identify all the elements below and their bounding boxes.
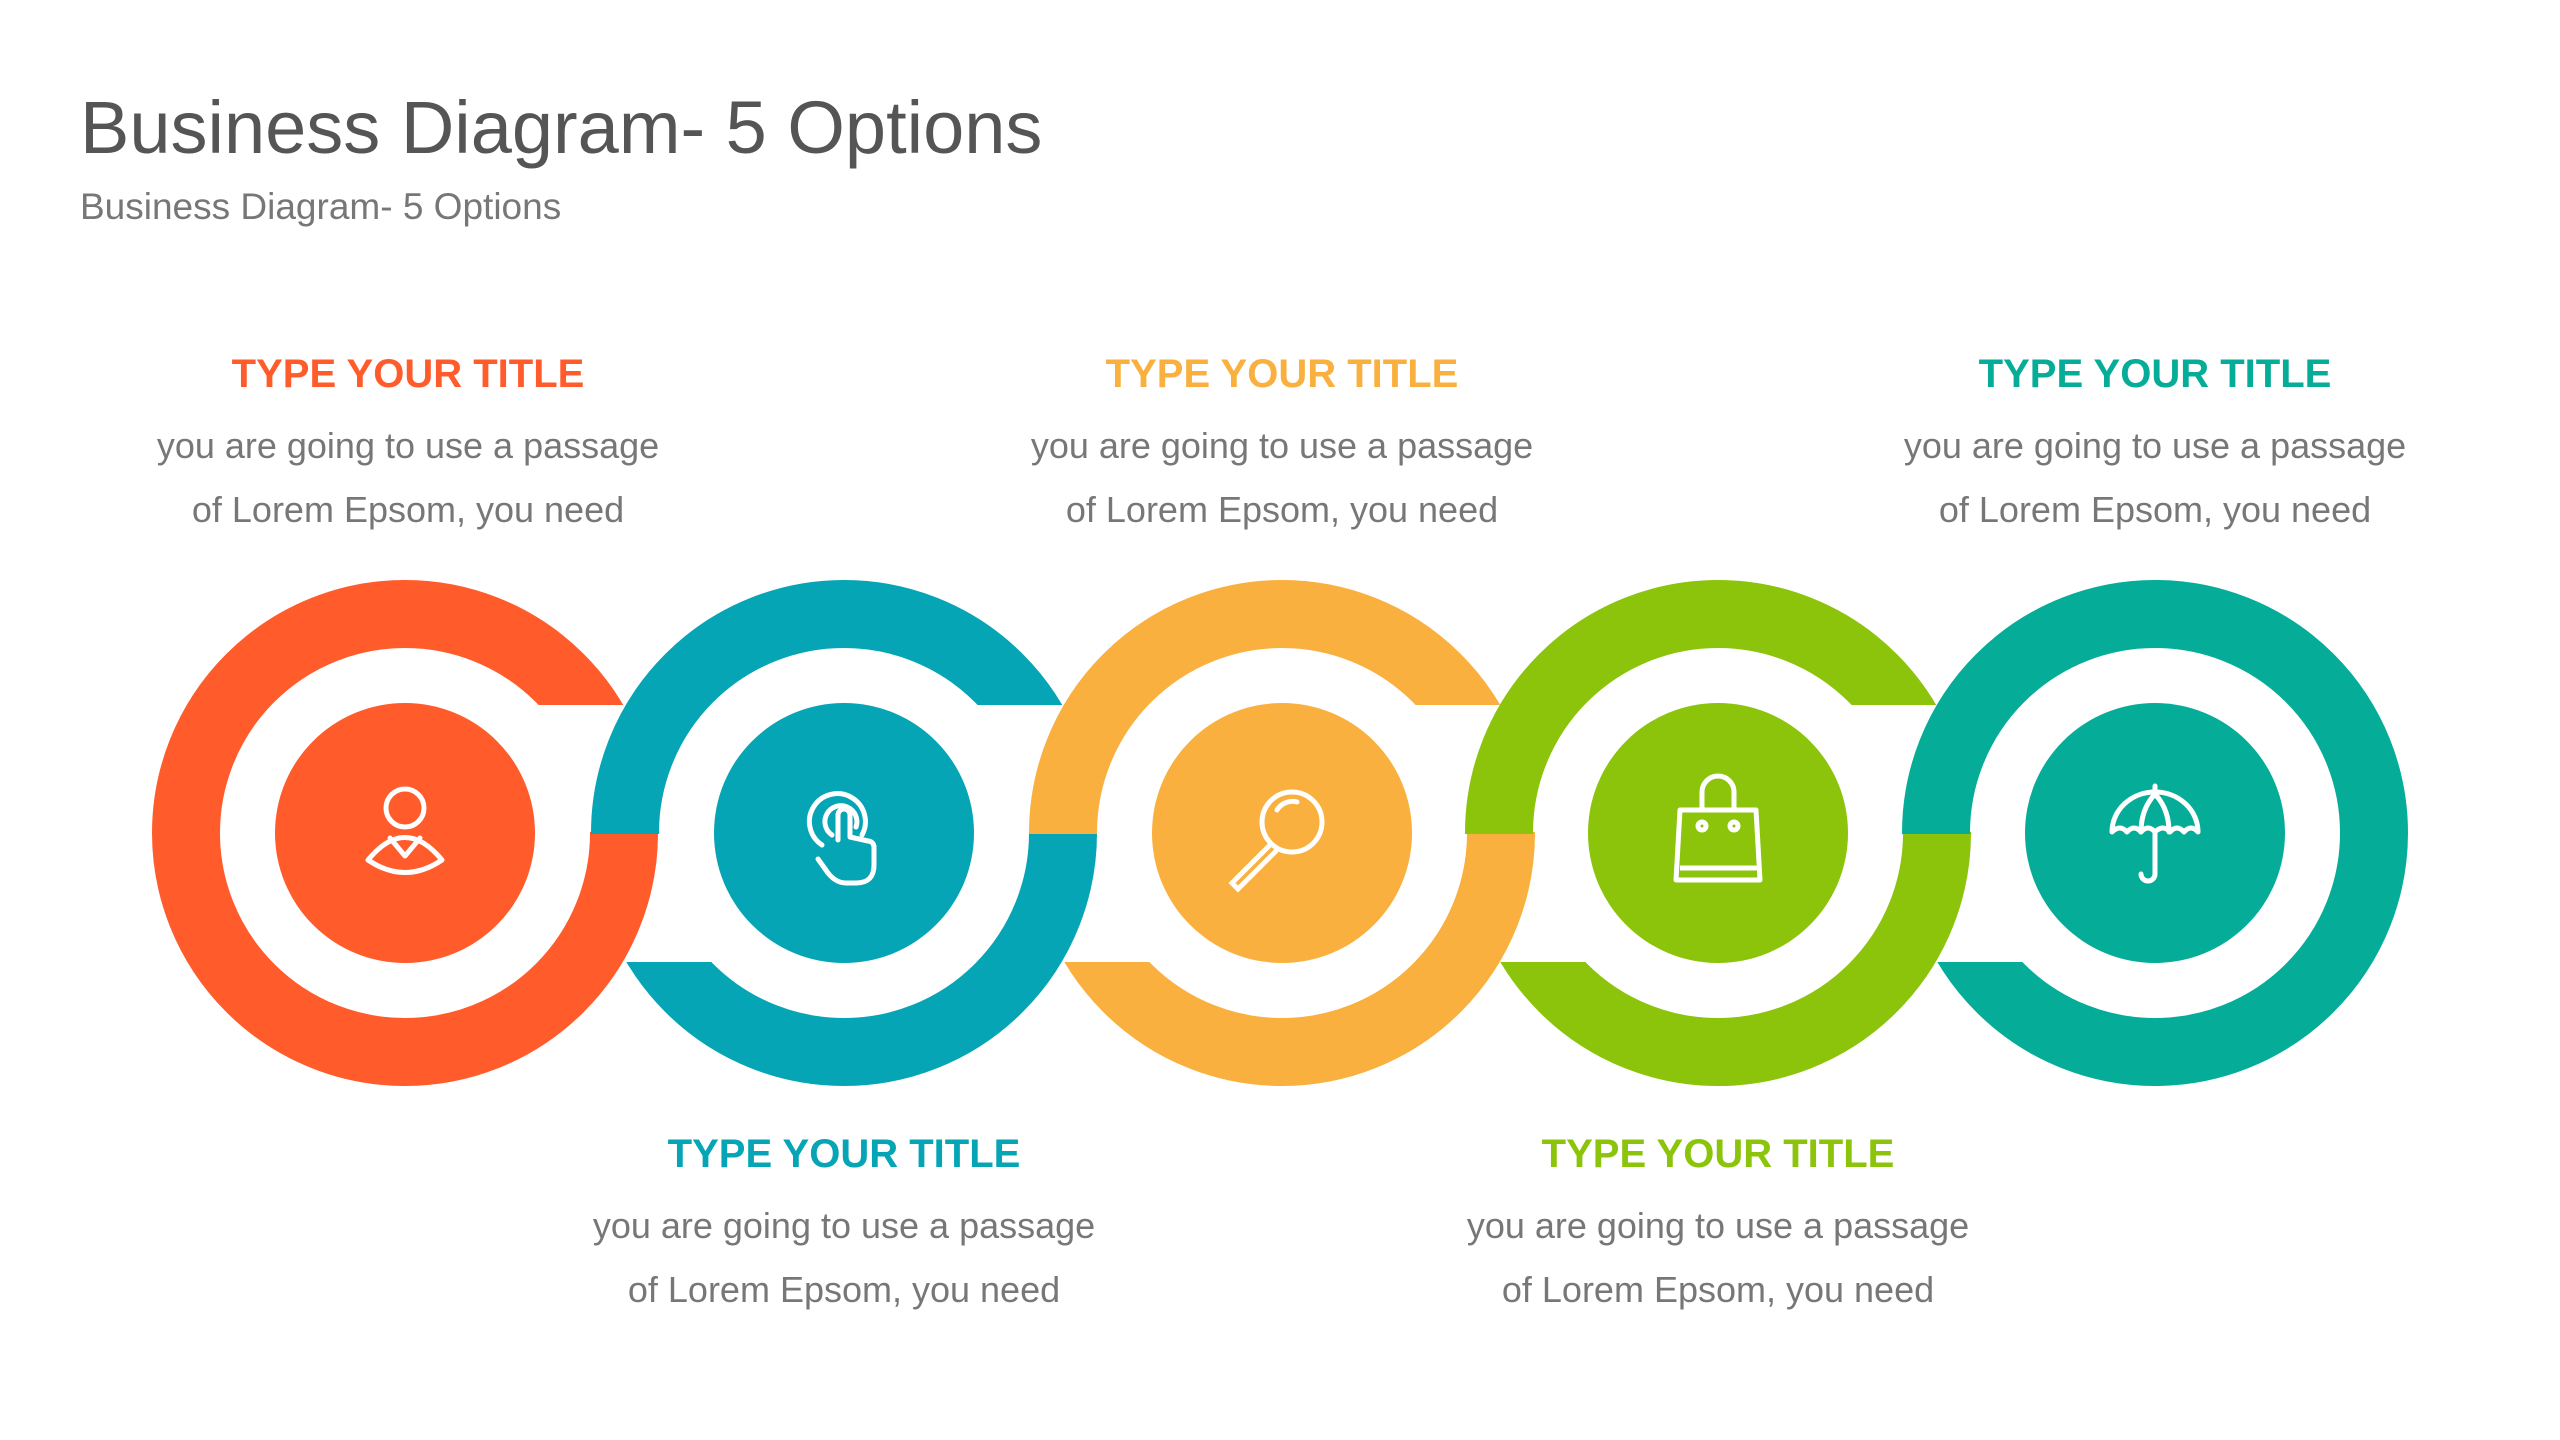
text block 3: TYPE YOUR TITLE [1106, 352, 1458, 396]
text block 5: TYPE YOUR TITLE [1979, 352, 2331, 396]
text block 3: of Lorem Epsom, you need [1066, 489, 1498, 530]
text block 1: you are going to use a passage [157, 425, 659, 466]
icon: person [368, 789, 442, 872]
subtitle: Business Diagram- 5 Options [80, 186, 561, 227]
title: Business Diagram- 5 Options [80, 86, 1042, 169]
text block 1: of Lorem Epsom, you need [192, 489, 624, 530]
ring diagram [152, 580, 2408, 1086]
icon: touch hand [809, 794, 874, 883]
text block 5: you are going to use a passage [1904, 425, 2406, 466]
text block 1 [157, 352, 659, 530]
text block 4 [1467, 1132, 1969, 1310]
text block 3: you are going to use a passage [1031, 425, 1533, 466]
text block 2 [593, 1132, 1095, 1310]
text block 5: of Lorem Epsom, you need [1939, 489, 2371, 530]
text block 1: TYPE YOUR TITLE [232, 352, 584, 396]
text block 4: of Lorem Epsom, you need [1502, 1269, 1934, 1310]
ring 1 [186, 614, 624, 1052]
text block 4: TYPE YOUR TITLE [1542, 1132, 1894, 1176]
ring 2 [625, 614, 1063, 1052]
ring 4 [1499, 614, 1937, 1052]
text block 5 [1904, 352, 2406, 530]
text block 3 [1031, 352, 1533, 530]
icon: umbrella [2112, 786, 2198, 881]
text block 4: you are going to use a passage [1467, 1205, 1969, 1246]
icon: magnifier [1232, 792, 1322, 889]
ring 5 [1936, 614, 2374, 1052]
text block 2: TYPE YOUR TITLE [668, 1132, 1020, 1176]
text block 2: you are going to use a passage [593, 1205, 1095, 1246]
text block 2: of Lorem Epsom, you need [628, 1269, 1060, 1310]
icon: shopping bag [1676, 776, 1760, 880]
ring 3 [1063, 614, 1501, 1052]
